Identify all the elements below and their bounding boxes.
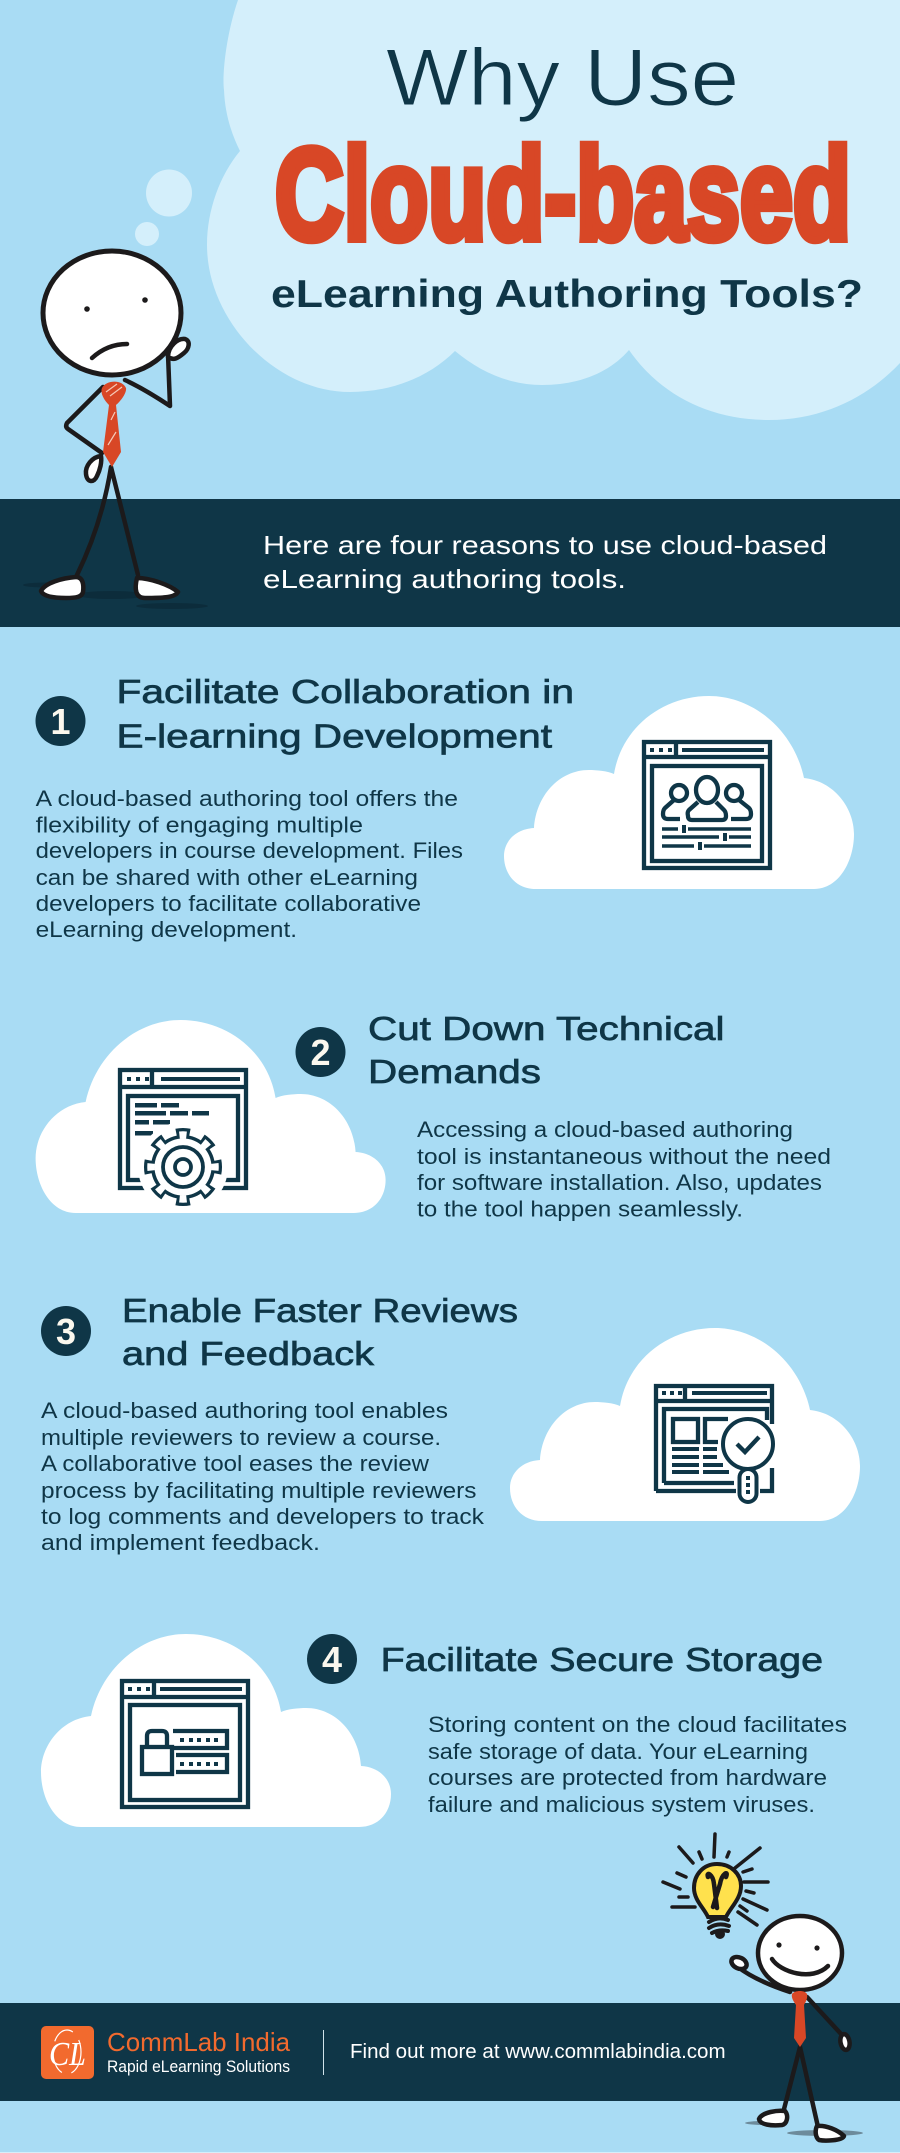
number badge 2: 2 [310, 1032, 331, 1073]
footer logo: Rapid eLearning Solutions [107, 2057, 290, 2076]
heading 3: Enable Faster Reviews [122, 1292, 518, 1329]
body text 3: A cloud-based authoring tool enables [41, 1398, 448, 1423]
body text 4: Storing content on the cloud facilitates [428, 1712, 847, 1737]
body text 1: flexibility of engaging multiple [36, 812, 363, 838]
character: happy man [729, 1916, 863, 2141]
heading 1: E-learning Development [116, 718, 552, 754]
body text 3: process by facilitating multiple reviewers [41, 1478, 476, 1503]
footer divider and link: Find out more at www.commlabindia.com [350, 2041, 726, 2063]
section 1 [36, 673, 854, 942]
icon: technical settings window [118, 1068, 248, 1212]
heading 1 [116, 673, 574, 754]
body text 3 [41, 1398, 485, 1555]
number badge 3 [41, 1306, 91, 1356]
intro text [263, 530, 827, 594]
icon: collaboration window [642, 740, 772, 868]
icon: secure lock window [120, 1679, 250, 1807]
body text 3: and implement feedback. [41, 1530, 320, 1555]
number badge 1 [36, 696, 86, 746]
title: Why Use [386, 33, 739, 123]
section 2 [36, 1010, 831, 1222]
icon: review window with magnifier [654, 1384, 774, 1502]
bottom edge line [0, 2152, 900, 2153]
heading 2: Demands [368, 1053, 541, 1090]
footer band [0, 2003, 900, 2101]
body text 4: failure and malicious system viruses. [428, 1792, 815, 1817]
body text 2: to the tool happen seamlessly. [417, 1196, 743, 1222]
intro band [0, 499, 900, 627]
footer logo: CommLab India [107, 2027, 291, 2057]
title: eLearning Authoring Tools? [271, 273, 863, 316]
number badge 4: 4 [322, 1639, 342, 1680]
body text 3: A collaborative tool eases the review [41, 1451, 429, 1476]
heading 1: Facilitate Collaboration in [116, 673, 574, 710]
title [271, 33, 863, 316]
number badge 3: 3 [56, 1311, 76, 1352]
footer logo: CL [49, 2036, 86, 2073]
thought bubbles [135, 170, 192, 246]
number badge 2 [296, 1027, 346, 1077]
heading 3: and Feedback [122, 1335, 375, 1372]
body text 3: multiple reviewers to review a course. [41, 1425, 441, 1450]
section 4 [41, 1634, 847, 1827]
body text 2: for software installation. Also, updates [417, 1170, 822, 1195]
heading 3 [122, 1292, 518, 1372]
body text 2: tool is instantaneous without the need [417, 1144, 831, 1169]
footer logo [41, 2026, 291, 2079]
body text 4 [428, 1712, 847, 1817]
icon: light bulb [663, 1834, 768, 1939]
cloud 3 [510, 1328, 860, 1521]
body text 4: safe storage of data. Your eLearning [428, 1739, 808, 1764]
character: thinking man [23, 251, 208, 609]
number badge 1: 1 [50, 701, 71, 742]
body text 3: to log comments and developers to track [41, 1504, 485, 1529]
heading 4: Facilitate Secure Storage [381, 1641, 823, 1678]
body text 1: developers to facilitate collaborative [36, 891, 421, 916]
body text 4: courses are protected from hardware [428, 1765, 827, 1790]
body text 1: A cloud-based authoring tool offers the [36, 786, 458, 811]
body text 1: can be shared with other eLearning [36, 865, 418, 890]
section 3 [41, 1292, 860, 1555]
intro text: eLearning authoring tools. [263, 564, 626, 594]
cloud 2 [36, 1020, 386, 1213]
header thought cloud [207, 0, 900, 420]
cloud 4 [41, 1634, 391, 1827]
body text 2: Accessing a cloud-based authoring [417, 1117, 793, 1142]
number badge 4 [307, 1634, 357, 1684]
heading 2: Cut Down Technical [368, 1010, 724, 1047]
body text 1: eLearning development. [36, 917, 297, 942]
body text 1: developers in course development. Files [36, 838, 463, 863]
body text 2 [417, 1117, 831, 1222]
heading 2 [368, 1010, 724, 1090]
intro text: Here are four reasons to use cloud-based [263, 530, 827, 560]
body text 1 [36, 786, 463, 942]
cloud 1 [504, 696, 854, 889]
